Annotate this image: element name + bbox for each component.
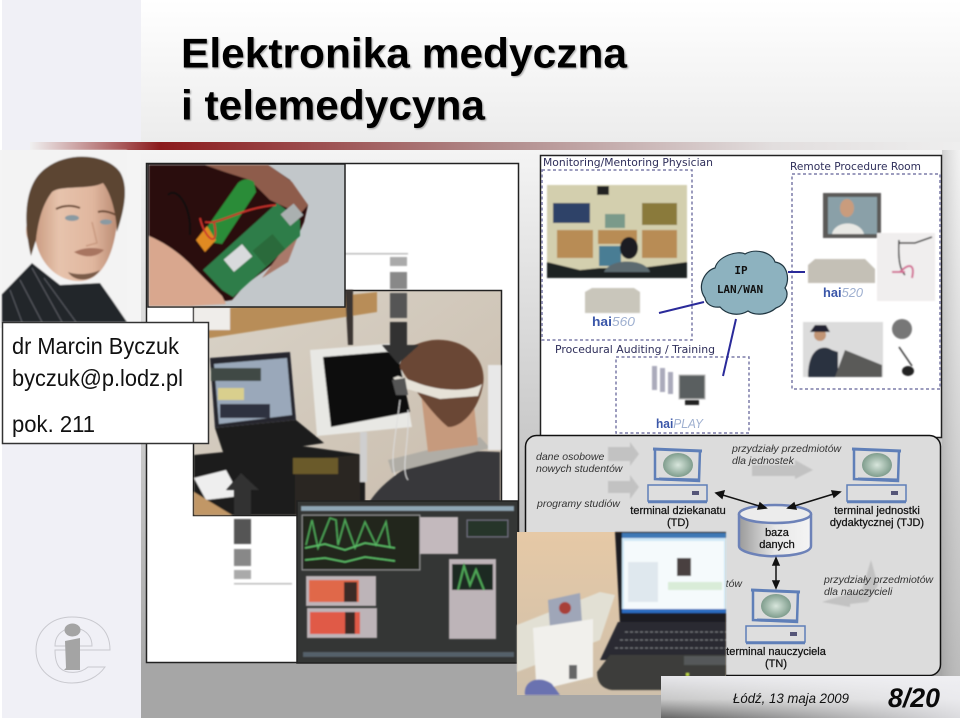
info box: pok. 211: [12, 411, 95, 437]
panel labels: [543, 157, 921, 356]
white central panel: [146, 164, 518, 662]
product labels: hai520: [823, 285, 864, 300]
cloud: IP: [734, 264, 748, 277]
italic labels: dla nauczycieli: [824, 586, 893, 598]
terminal labels: terminal dziekanatu: [630, 505, 726, 517]
terminal labels: (TN): [765, 658, 787, 670]
italic labels: programy studiów: [536, 498, 621, 510]
laptop and card reader photo: [517, 532, 726, 695]
terminals: [648, 449, 906, 643]
circuit board photo: [148, 164, 345, 307]
EEG session photo: [194, 290, 502, 516]
telemedicine network panel: [540, 156, 942, 438]
italic labels: dla jednostek: [732, 455, 795, 467]
title: i telemedycyna: [181, 82, 486, 128]
double arrows: [716, 491, 840, 588]
grey input arrows: [608, 442, 878, 607]
cloud: [701, 251, 788, 314]
page number: 8/20: [888, 683, 940, 713]
red divider bar: [30, 142, 960, 150]
terminal labels: (TD): [667, 517, 689, 529]
info box: dr Marcin Byczuk: [12, 333, 179, 359]
logo watermark: [36, 617, 110, 683]
italic labels: tów: [726, 578, 743, 590]
cloud: LAN/WAN: [717, 283, 763, 296]
terminal labels: terminal nauczyciela: [726, 646, 827, 658]
terminal labels: terminal jednostki: [834, 505, 920, 517]
info box: byczuk@p.lodz.pl: [12, 365, 183, 391]
terminal labels: dydaktycznej (TJD): [830, 517, 924, 529]
product labels: [592, 285, 864, 431]
title: [181, 30, 628, 128]
italic labels: dane osobowe: [536, 451, 604, 463]
info box: [2, 322, 208, 444]
title: Elektronika medyczna: [181, 30, 628, 76]
arrow: up grey blocks: [226, 473, 292, 584]
flow diagram panel: [526, 436, 940, 676]
italic labels: nowych studentów: [536, 463, 624, 475]
database cylinder: [739, 505, 811, 556]
panel labels: Monitoring/Mentoring Physician: [543, 157, 713, 169]
footer band: [661, 676, 960, 718]
italic labels: przydziały przedmiotów: [731, 443, 843, 455]
italic labels: przydziały przedmiotów: [823, 574, 935, 586]
date: Łódź, 13 maja 2009: [733, 690, 849, 706]
arrow: down grey blocks: [343, 253, 419, 364]
terminal labels: [630, 505, 924, 670]
panel labels: Procedural Auditing / Training: [555, 344, 715, 356]
network links: [659, 272, 805, 376]
panel labels: Remote Procedure Room: [790, 161, 921, 173]
product labels: haiPLAY: [656, 416, 704, 431]
database cylinder: danych: [759, 539, 795, 551]
product labels: hai560: [592, 314, 636, 329]
database cylinder: baza: [765, 527, 790, 539]
screen software photo: [297, 501, 518, 663]
italic labels: [536, 443, 935, 598]
portrait photo: [2, 150, 127, 322]
